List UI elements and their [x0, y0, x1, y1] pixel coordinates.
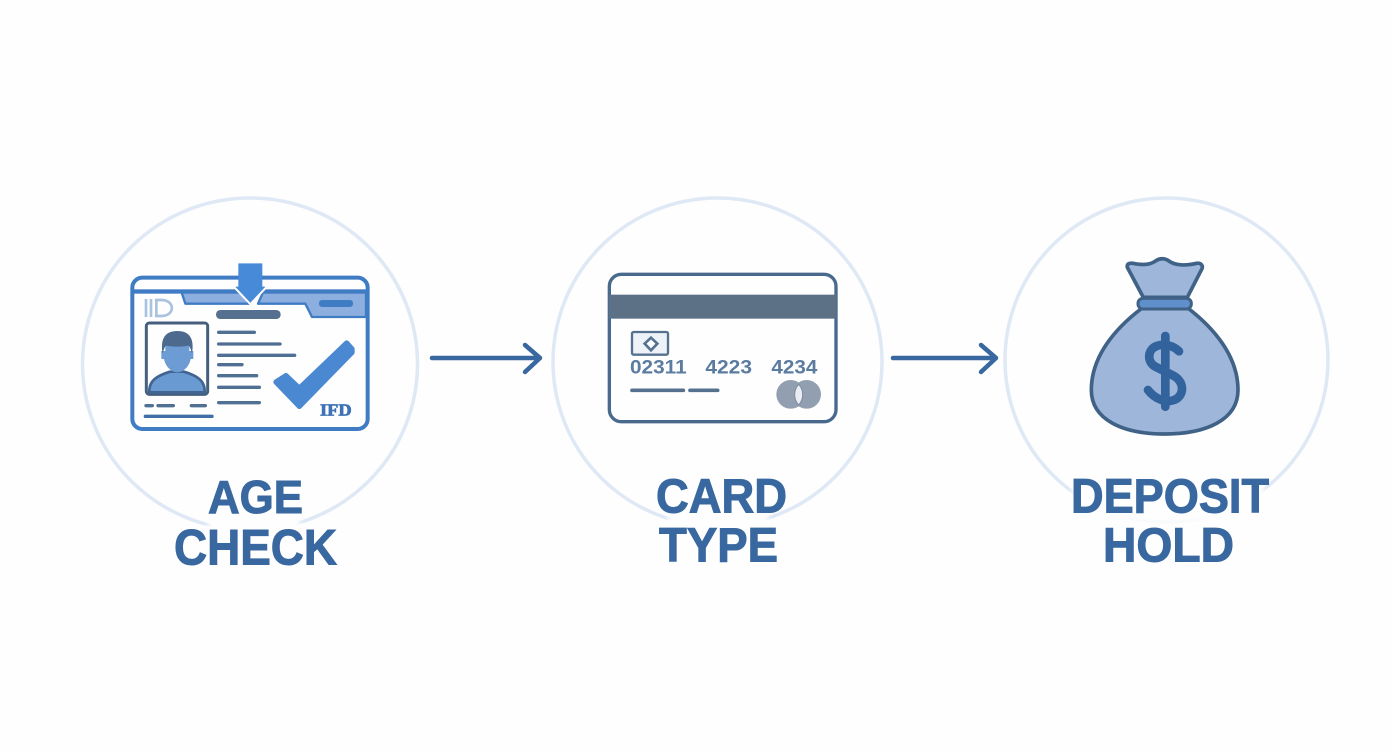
icon: money bag	[1091, 259, 1238, 434]
arrow 1	[432, 345, 540, 372]
photo portrait	[146, 323, 208, 394]
card body	[132, 278, 368, 429]
arrow 2	[893, 345, 996, 372]
label: card type	[656, 470, 787, 572]
bag body	[1091, 309, 1238, 434]
card network logo	[776, 380, 821, 409]
circle: deposit hold	[1005, 198, 1328, 522]
card numbers	[630, 358, 818, 379]
label: deposit hold	[1071, 470, 1269, 572]
arrow marker	[233, 264, 268, 306]
label: age check: AGE	[208, 471, 303, 523]
label halos	[208, 472, 1264, 542]
IFD mark: IFD	[320, 401, 352, 420]
label: deposit hold: DEPOSIT	[1071, 470, 1269, 524]
ID mark	[146, 299, 172, 317]
magnetic stripe	[609, 295, 836, 319]
dollar sign	[1148, 336, 1182, 407]
icon: ID card with checkmark	[132, 264, 368, 429]
header pill	[319, 300, 353, 307]
card numbers: 02311	[630, 358, 687, 379]
card numbers: 4234	[771, 358, 818, 379]
header tab left	[181, 292, 251, 304]
bag top	[1127, 259, 1202, 297]
circle: age check	[82, 198, 418, 530]
bag tie	[1138, 298, 1191, 309]
header tab right	[258, 292, 366, 317]
circle: card type	[553, 198, 882, 526]
card body	[609, 274, 836, 422]
signature lines	[632, 385, 718, 396]
card numbers: 4223	[705, 358, 752, 379]
label: age check	[174, 471, 337, 576]
chip icon	[632, 332, 668, 355]
label: age check: CHECK	[174, 520, 337, 576]
label: deposit hold: HOLD	[1103, 520, 1234, 572]
label: card type: CARD	[656, 470, 787, 524]
header line	[133, 289, 367, 294]
checkmark	[276, 343, 352, 406]
icon: credit card	[609, 274, 836, 422]
detail lines	[145, 332, 295, 416]
name bar	[216, 310, 281, 319]
label: card type: TYPE	[659, 520, 778, 572]
